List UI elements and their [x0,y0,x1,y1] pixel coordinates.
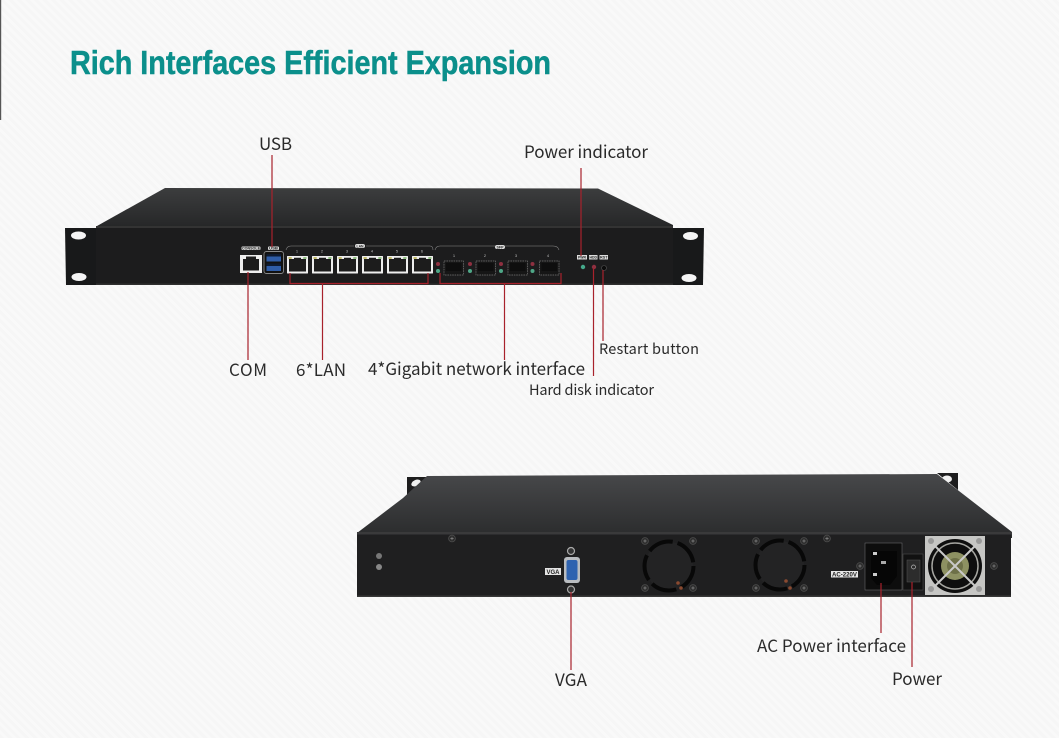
LAN ports: 6 [421,248,424,254]
usb ports [264,246,284,274]
LAN ports: 3 [346,248,349,254]
left rack ear [65,228,97,285]
fan vent 1 [642,538,696,591]
front device [65,188,704,285]
rear panel [357,533,1011,597]
leader line: AC power [880,583,882,633]
leader line: hard disk indicator [592,268,594,376]
label: USB: USB [259,130,292,155]
front panel [96,226,673,285]
SFP gigabit ports: 4 [547,253,550,258]
leader line: COM [247,272,249,360]
AC 220V label: AC-220V [832,572,857,578]
LAN ports: 2 [321,248,324,254]
right rack ear [672,228,704,285]
leader line: USB [271,155,273,247]
SFP gigabit ports [435,245,559,275]
label: restart button: Restart button [599,338,699,359]
label: power: Power [892,665,942,690]
console port [240,246,262,273]
label: 6*LAN: 6*LAN [296,356,346,381]
leader line: gigabit interface bracket [440,273,561,360]
console port: CONSOLE [242,246,260,250]
top cover [97,188,673,230]
VGA port: VGA [546,570,560,576]
fan vent 2 [753,538,807,591]
LAN ports: LAN [356,244,364,248]
SFP gigabit ports: 2 [484,253,487,258]
PSU fan [925,536,985,595]
label: gigabit interface: 4*Gigabit network interface [368,355,585,380]
leader line: restart button [602,270,604,341]
top cover [357,474,1012,538]
leader line: power indicator [580,168,582,256]
label: power indicator: Power indicator [524,138,648,163]
label: AC power interface: AC Power interface [757,632,906,657]
indicators and restart button: HDD [590,255,597,260]
indicators and restart button: RST [600,255,608,260]
back rack ears [407,473,958,498]
back device [357,473,1012,597]
label: hard disk indicator: Hard disk indicator [529,379,654,400]
usb ports: USB [269,246,278,250]
LAN ports: 5 [396,248,399,254]
leader line: 6*LAN bracket [290,273,428,360]
label: VGA: VGA [555,666,588,691]
leader line: VGA [570,592,572,670]
SFP gigabit ports: 1 [453,253,456,258]
label: COM: COM [229,356,267,381]
power switch [903,554,923,590]
title: Rich Interfaces Efficient Expansion [70,44,551,81]
left edge line [0,0,1,120]
indicators and restart button [577,255,608,270]
ground terminals [376,553,382,570]
panel screws [449,535,997,569]
AC socket [865,543,902,590]
SFP gigabit ports: SFP [496,245,504,249]
leader line: power switch [911,582,913,667]
LAN ports: 1 [296,248,299,254]
indicators and restart button: PWR [578,255,586,260]
LAN ports [286,244,433,274]
VGA port [545,548,580,593]
LAN ports: 4 [371,248,374,254]
SFP gigabit ports: 3 [515,253,518,258]
